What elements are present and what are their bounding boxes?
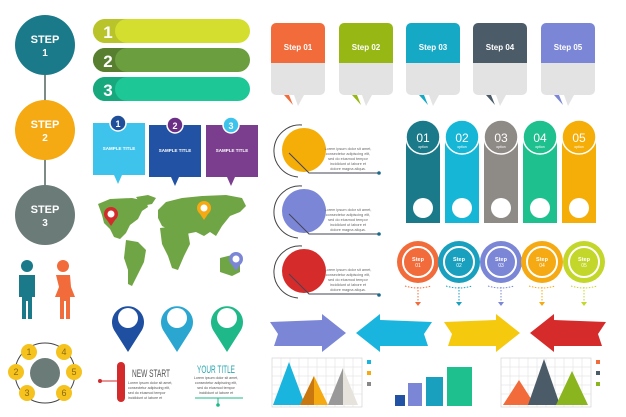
square callouts: SAMPLE TITLE [159,148,191,153]
cycle 1-6 [8,343,82,403]
square callouts [93,115,258,186]
option columns 01-05: option [574,145,584,149]
circle text items: dolore magna aliqua. [330,167,366,171]
circle text items: consectetur adipiscing elit, [326,152,370,156]
circle text items [274,125,381,298]
speech tabs step 01-05: Step 04 [486,43,515,52]
numbered bars: 1 [103,23,113,42]
option columns 01-05: 01 [416,131,430,145]
square callouts: 3 [228,121,234,131]
cycle 1-6: 1 [26,347,32,357]
option columns 01-05 [406,120,596,223]
your title block [194,364,243,407]
option columns 01-05: option [457,145,467,149]
step circles timeline: 1 [42,48,48,59]
step rings with dotted arrows: 05 [581,263,587,269]
numbered bars [93,19,250,101]
cycle 1-6: 4 [61,347,67,357]
chart 1 triangles [272,358,371,407]
circle text items: consectetur adipiscing elit, [326,273,370,277]
your title block: Lorem ipsum dolor sit amet, [194,376,238,380]
circle text items: sed do eiusmod tempor [328,278,369,282]
speech tabs step 01-05: Step 05 [554,43,583,52]
new start block: incididunt ut labore et [128,396,162,400]
speech tabs step 01-05: Step 02 [352,43,381,52]
cycle 1-6: 3 [24,388,30,398]
location pins [112,306,243,352]
step circles timeline: STEP [31,119,59,131]
speech tabs step 01-05: Step 03 [419,43,448,52]
step rings with dotted arrows: Step [495,257,508,263]
step rings with dotted arrows: 04 [539,263,545,269]
speech tabs step 01-05: Step 01 [284,43,313,52]
option columns 01-05: option [418,145,428,149]
world map [98,195,246,286]
option columns 01-05: 03 [494,131,508,145]
circle text items: incididunt ut labore et [330,162,367,166]
map pins [104,201,243,271]
arrows row [270,314,606,352]
square callouts: SAMPLE TITLE [103,146,135,151]
speech tabs step 01-05 [271,23,595,106]
circle text items: consectetur adipiscing elit, [326,213,370,217]
circle text items: sed do eiusmod tempor [328,218,369,222]
people icons [19,260,75,319]
new start block: NEW START [132,368,170,380]
step circles timeline: 2 [42,133,48,144]
circle text items: incididunt ut labore et [330,223,367,227]
step rings with dotted arrows: Step [578,257,591,263]
circle text items: dolore magna aliqua. [330,228,366,232]
your title block: sed do eiusmod tempor [197,386,236,390]
step rings with dotted arrows: Step [453,257,466,263]
cycle 1-6: 2 [13,367,19,377]
new start block: Lorem ipsum dolor sit amet, [128,381,172,385]
new start block: consectetur adipiscing elit, [128,386,170,390]
new start block [98,362,172,402]
new start block: sed do eiusmod tempor [128,391,166,395]
option columns 01-05: 02 [455,131,469,145]
your title block: YOUR TITLE [197,364,235,376]
step rings with dotted arrows: 02 [456,263,462,269]
step rings with dotted arrows [397,241,605,306]
option columns 01-05: 04 [533,131,547,145]
circle text items: dolore magna aliqua. [330,288,366,292]
your title block: consectetur adipiscing elit, [195,381,237,385]
step circles timeline [15,15,75,245]
circle text items: Lorem ipsum dolor sit amet, [325,268,371,272]
circle text items: Lorem ipsum dolor sit amet, [325,147,371,151]
cycle 1-6: 6 [61,388,67,398]
option columns 01-05: 05 [572,131,586,145]
cycle 1-6: 5 [71,367,77,377]
your title block: incididunt ut labore et [199,391,233,395]
step rings with dotted arrows: 03 [498,263,504,269]
numbered bars: 3 [103,81,113,100]
step circles timeline: 3 [42,218,48,229]
square callouts: SAMPLE TITLE [216,148,248,153]
circle text items: sed do eiusmod tempor [328,157,369,161]
step circles timeline: STEP [31,34,59,46]
numbered bars: 2 [103,52,113,71]
chart 3 triangles [501,358,600,407]
option columns 01-05: option [535,145,545,149]
square callouts: 2 [172,121,178,131]
square callouts: 1 [115,119,121,129]
step circles timeline: STEP [31,204,59,216]
step rings with dotted arrows: Step [536,257,549,263]
circle text items: incididunt ut labore et [330,283,367,287]
circle text items: Lorem ipsum dolor sit amet, [325,208,371,212]
option columns 01-05: option [496,145,506,149]
chart 2 bars [395,367,472,406]
step rings with dotted arrows: Step [412,257,425,263]
step rings with dotted arrows: 01 [415,263,421,269]
